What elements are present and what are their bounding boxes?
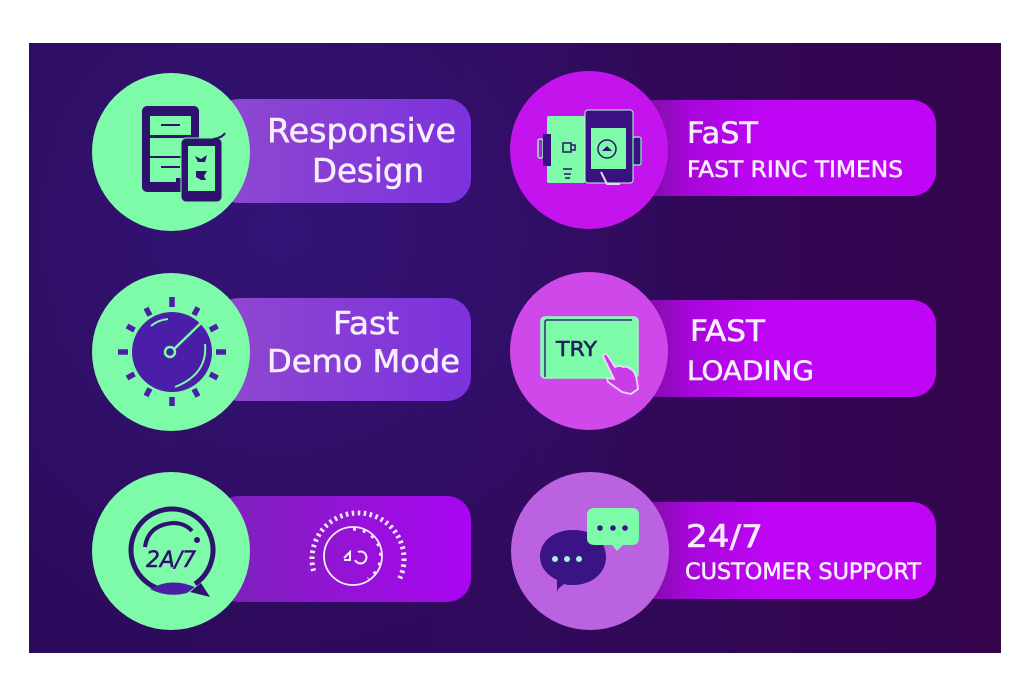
pill: customer support [630, 502, 936, 599]
icon: speed gauge [118, 297, 226, 406]
icon: tablet and phone [142, 106, 225, 202]
pill: fast [630, 100, 936, 196]
label: fast: FaST [687, 116, 758, 150]
panel: 24/7 customer support [511, 472, 936, 630]
icon: folding devices [538, 110, 641, 184]
circle: customer support [511, 472, 669, 630]
label: fast demo mode: Demo Mode [267, 344, 460, 380]
label: customer support: CUSTOMER SUPPORT [685, 560, 922, 585]
label: fast [687, 116, 903, 183]
circle: 24/7 [92, 472, 250, 630]
label: responsive design: Responsive [267, 111, 456, 150]
label: customer support: 24/7 [686, 519, 763, 555]
pill: fast loading [630, 300, 936, 397]
label: fast demo mode [267, 306, 460, 380]
label: responsive design [267, 111, 456, 190]
label: fast loading: LOADING [687, 356, 814, 387]
label: customer support [685, 519, 922, 585]
circle: fast [510, 71, 668, 229]
panel: responsive design [92, 73, 471, 231]
icon: chat bubbles [540, 508, 639, 593]
pill: responsive design [215, 99, 471, 203]
circle: fast demo mode [92, 273, 250, 431]
label: fast loading: FAST [690, 314, 765, 348]
panel: fast loading [510, 272, 936, 430]
circle: fast loading [510, 272, 668, 430]
panel: 24/7 dial [92, 472, 471, 630]
icon: 24/7 clock ring: 2A/7 [146, 548, 196, 573]
label: responsive design: Design [312, 151, 424, 190]
label: fast loading [687, 314, 814, 387]
circle: responsive design [92, 73, 250, 231]
icon: try button with pointer [541, 317, 638, 394]
pill: fast demo mode [215, 298, 471, 401]
panel: fast [510, 71, 936, 229]
label: fast: FAST RINC TIMENS [687, 158, 903, 183]
pill: 24/7 dial [215, 496, 471, 602]
icon: try button with pointer: TRY [555, 337, 598, 361]
panel: fast demo mode [92, 273, 471, 431]
label: fast demo mode: Fast [333, 306, 399, 342]
icon: 24/7 clock ring [119, 497, 225, 603]
icon: white speed dial [312, 513, 404, 585]
